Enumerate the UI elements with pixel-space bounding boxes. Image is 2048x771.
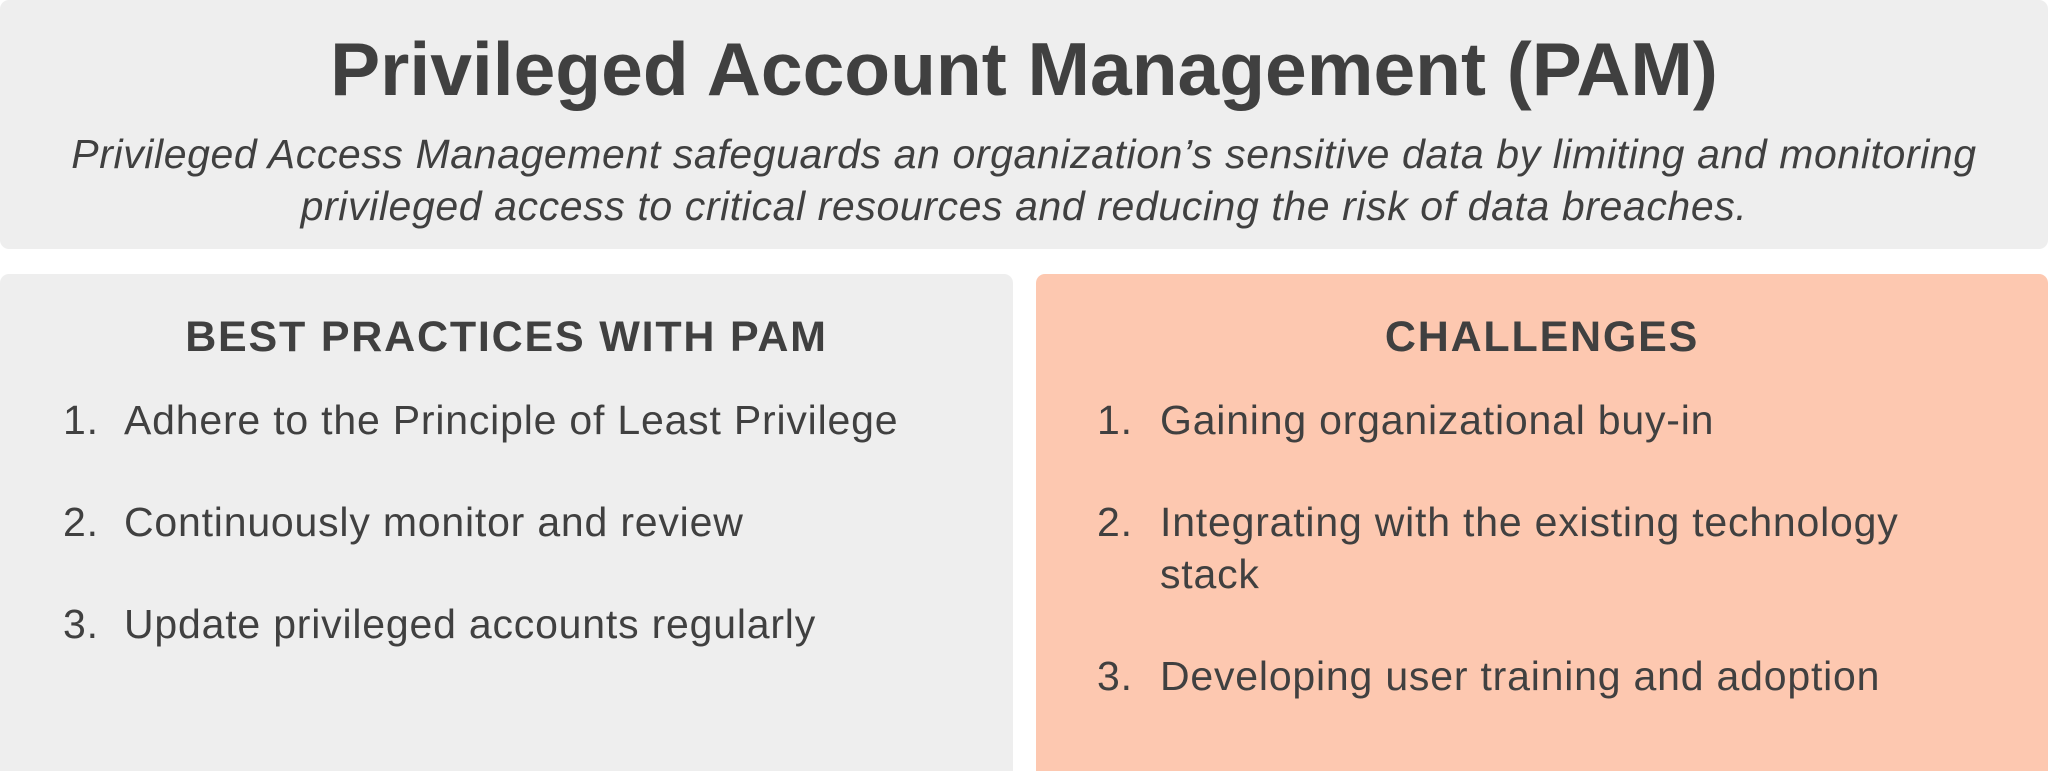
item 2 [1097, 499, 1899, 597]
subtitle [71, 131, 1977, 229]
item 2: stack [1160, 551, 1260, 597]
panel: header [0, 0, 2048, 249]
item 1: Adhere to the Principle of Least Privilege [124, 397, 898, 443]
item 3: Update privileged accounts regularly [124, 601, 816, 647]
item 3: Developing user training and adoption [1160, 653, 1880, 699]
item 1: 1. [1097, 397, 1133, 443]
subtitle: privileged access to critical resources and reducing the risk of data breaches. [301, 183, 1747, 229]
item 3: 3. [1097, 653, 1133, 699]
item 2: 2. [63, 499, 99, 545]
heading: challenges: CHALLENGES [1385, 313, 1699, 361]
item 2: 2. [1097, 499, 1133, 545]
item 2: Integrating with the existing technology [1160, 499, 1899, 545]
panel: best practices [0, 274, 1013, 771]
subtitle: Privileged Access Management safeguards an organization’s sensitive data by limiting and monitoring [71, 131, 1977, 177]
panel: challenges [1036, 274, 2048, 771]
heading: best practices: BEST PRACTICES WITH PAM [185, 313, 828, 361]
item 1: 1. [63, 397, 99, 443]
item 1: Gaining organizational buy-in [1160, 397, 1714, 443]
title: Privileged Account Management (PAM) [330, 27, 1718, 111]
item 2: Continuously monitor and review [124, 499, 744, 545]
item 3: 3. [63, 601, 99, 647]
